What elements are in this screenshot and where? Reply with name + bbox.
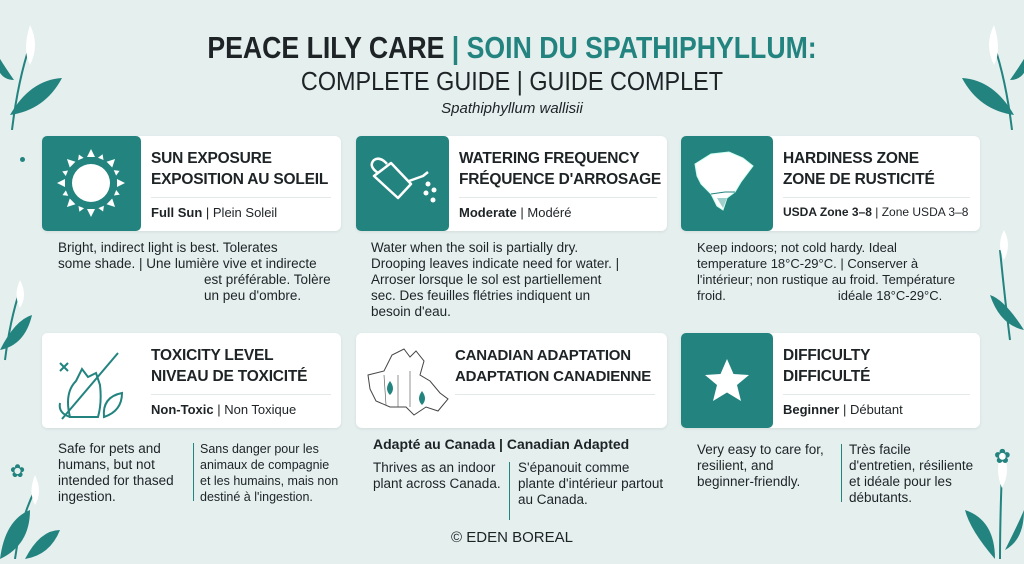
decoration: right top leaves (962, 26, 1024, 130)
panel: toxicity: TOXICITY LEVEL (151, 347, 273, 364)
text: plante d'intérieur partout (518, 476, 663, 491)
text: hardiness: Keep indoors; not cold hardy. Ideal (697, 240, 897, 255)
text: hardiness: temperature 18°C-29°C. | Conserver à (697, 256, 918, 271)
panel: difficulty (681, 333, 980, 428)
panel: difficulty: DIFFICULTY (783, 347, 870, 364)
icon: cat (42, 333, 141, 428)
text: watering: Water when the soil is partially dry. (371, 240, 578, 255)
title (207, 30, 817, 117)
panel: sun exposure: Full Sun | Plein Soleil (151, 205, 277, 220)
text: watering: Drooping leaves indicate need for water. | (371, 256, 619, 271)
text: plant across Canada. (373, 476, 501, 491)
panel: hardiness: USDA Zone 3–8 | Zone USDA 3–8 (783, 205, 968, 219)
text: Thrives as an indoor (373, 460, 495, 475)
panel: sun exposure: EXPOSITION AU SOLEIL (151, 171, 328, 188)
panel: sun exposure: SUN EXPOSURE (151, 150, 272, 167)
text: hardiness: froid. idéale 18°C-29°C. (697, 288, 942, 303)
text: sun: est préférable. Tolère (204, 272, 331, 287)
text: sun (58, 240, 331, 303)
icon: canada map (367, 348, 449, 416)
footer: brand: © EDEN BOREAL (451, 529, 573, 546)
text: watering: besoin d'eau. (371, 304, 451, 319)
text: watering (371, 240, 619, 319)
text: animaux de compagnie (200, 458, 329, 472)
text: watering: Arroser lorsque le sol est partiellement (371, 272, 601, 287)
text: sun: Bright, indirect light is best. Tolerates (58, 240, 278, 255)
icon: star (681, 333, 773, 428)
text: toxicity (58, 441, 174, 504)
panel: difficulty: Beginner | Débutant (783, 402, 903, 417)
panel: canadian adaptation: CANADIAN ADAPTATION (455, 347, 631, 364)
panel: toxicity (42, 333, 341, 428)
text: d'entretien, résiliente (849, 458, 973, 473)
text: destiné à l'ingestion. (200, 490, 313, 504)
text: difficulty: resilient, and (697, 458, 774, 473)
text: difficulty: Very easy to care for, (697, 442, 824, 457)
panel: hardiness: ZONE DE RUSTICITÉ (783, 171, 935, 188)
panel: toxicity: Non-Toxic | Non Toxique (151, 402, 296, 417)
decoration: right bottom plants (965, 230, 1024, 559)
decoration: left bottom plants: ✿ (10, 461, 25, 481)
panel: toxicity: NIVEAU DE TOXICITÉ (151, 368, 307, 385)
panel: difficulty: DIFFICULTÉ (783, 368, 870, 385)
decoration: left bottom plants (0, 280, 60, 559)
text: watering: sec. Des feuilles flétries indiquent un (371, 288, 590, 303)
text: difficulty (697, 442, 824, 489)
panel: watering (356, 136, 667, 231)
text: toxicity: Safe for pets and (58, 441, 161, 456)
text: au Canada. (518, 492, 588, 507)
title: PEACE LILY CARE | SOIN DU SPATHIPHYLLUM: (207, 30, 817, 65)
panel: watering: WATERING FREQUENCY (459, 150, 639, 167)
panel: hardiness: HARDINESS ZONE (783, 150, 919, 167)
title: COMPLETE GUIDE | GUIDE COMPLET (301, 66, 723, 96)
text: S'épanouit comme (518, 460, 629, 475)
text: hardiness (697, 240, 955, 303)
text: Très facile (849, 442, 911, 457)
text: et idéale pour les (849, 474, 952, 489)
panel: canadian adaptation: ADAPTATION CANADIENNE (455, 368, 651, 385)
decoration: left top leaves (0, 26, 62, 130)
panel: watering: FRÉQUENCE D'ARROSAGE (459, 171, 661, 188)
text: Sans danger pour les (200, 442, 319, 456)
decoration: right bottom plants: ✿ (994, 446, 1011, 468)
text: toxicity: humans, but not (58, 457, 155, 472)
text: débutants. (849, 490, 912, 505)
dot (20, 157, 25, 162)
text: sun: some shade. | Une lumière vive et indirecte (58, 256, 317, 271)
panel: watering: Moderate | Modéré (459, 205, 571, 220)
text: hardiness: l'intérieur; non rustique au froid. Température (697, 272, 955, 287)
panel: hardiness (681, 136, 980, 231)
panel: sun exposure (42, 136, 341, 231)
text: et les humains, mais non (200, 474, 338, 488)
text: difficulty: beginner-friendly. (697, 474, 800, 489)
text: sun: un peu d'ombre. (204, 288, 301, 303)
panel: canadian adaptation (356, 333, 667, 428)
title: Spathiphyllum wallisii (441, 100, 583, 117)
text: canadian: Adapté au Canada | Canadian Adapted (373, 436, 629, 452)
icon: watering can (356, 136, 449, 231)
icon: sun (42, 136, 141, 231)
text: toxicity: ingestion. (58, 489, 116, 504)
text: toxicity: intended for thased (58, 473, 174, 488)
icon: north america map (681, 136, 773, 231)
